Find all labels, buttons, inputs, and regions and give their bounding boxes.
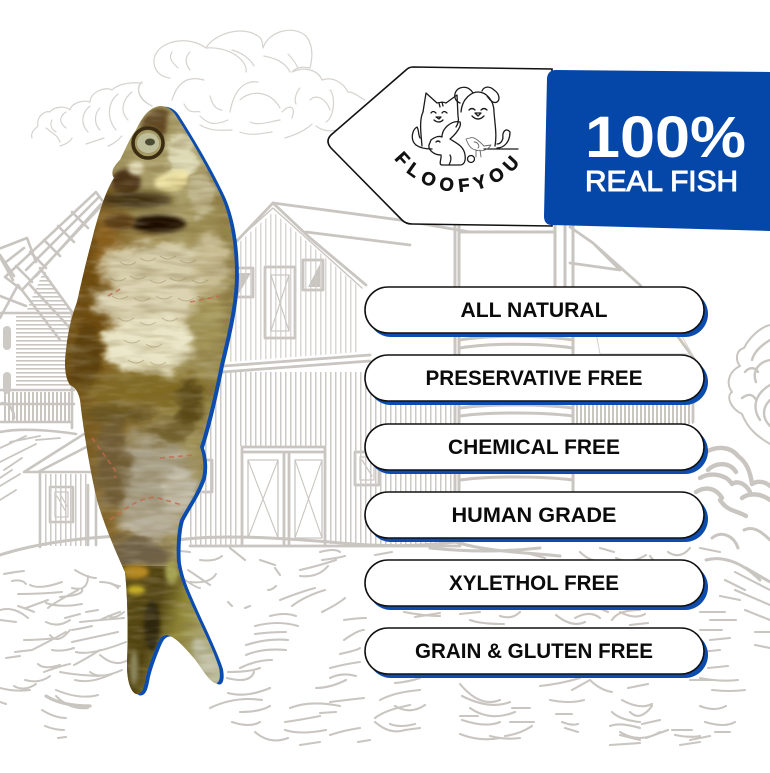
arrow tag with logo <box>327 66 553 227</box>
pill: grain and gluten free: GRAIN & GLUTEN FREE <box>415 640 653 663</box>
pill: human grade <box>365 492 708 542</box>
pill: xylethol free <box>365 560 708 610</box>
sketch: main barn wall hatching <box>190 212 693 546</box>
claim list <box>365 287 708 678</box>
logo: FLOOFYOU wordmark: FLOOFYOU <box>394 150 518 192</box>
pill: all natural <box>365 287 708 337</box>
fish photo <box>60 100 240 701</box>
pill: chemical free: CHEMICAL FREE <box>448 436 620 459</box>
sketch: small left barn <box>0 430 110 547</box>
blue panel shape <box>544 70 770 231</box>
pill: all natural: ALL NATURAL <box>460 299 608 322</box>
fish eye <box>133 128 163 158</box>
sketch: small barn hatching <box>42 474 88 546</box>
fish stitching marks <box>92 288 220 520</box>
pill: grain and gluten free <box>365 628 708 678</box>
fish scale arcs <box>110 256 214 365</box>
logo: bird <box>466 138 491 157</box>
sketch: windmill <box>0 192 104 428</box>
heading: 100%: 100% <box>585 105 746 170</box>
sketch: main barn <box>190 203 695 546</box>
sketch: ground line <box>0 536 560 556</box>
sketch: grain silo <box>455 226 573 540</box>
subheading: real fish: REAL FISH <box>585 166 738 198</box>
logo: animals <box>412 87 518 165</box>
fish body <box>60 100 240 701</box>
pill: preservative free <box>365 355 708 405</box>
pill: xylethol free: XYLETHOL FREE <box>449 572 619 595</box>
panel: 100% real fish <box>544 70 770 231</box>
sketch: lower field furrows <box>210 548 770 745</box>
pill: preservative free: PRESERVATIVE FREE <box>426 367 642 390</box>
pill: human grade: HUMAN GRADE <box>452 504 616 527</box>
tag shape <box>328 67 552 226</box>
pill: chemical free <box>365 424 708 474</box>
sketch: clouds <box>32 30 365 146</box>
sketch: windmill hatching <box>4 270 72 422</box>
fish blue outline <box>69 107 238 695</box>
sketch: crop field furrows <box>0 550 222 738</box>
sketch: right trees <box>696 325 770 582</box>
